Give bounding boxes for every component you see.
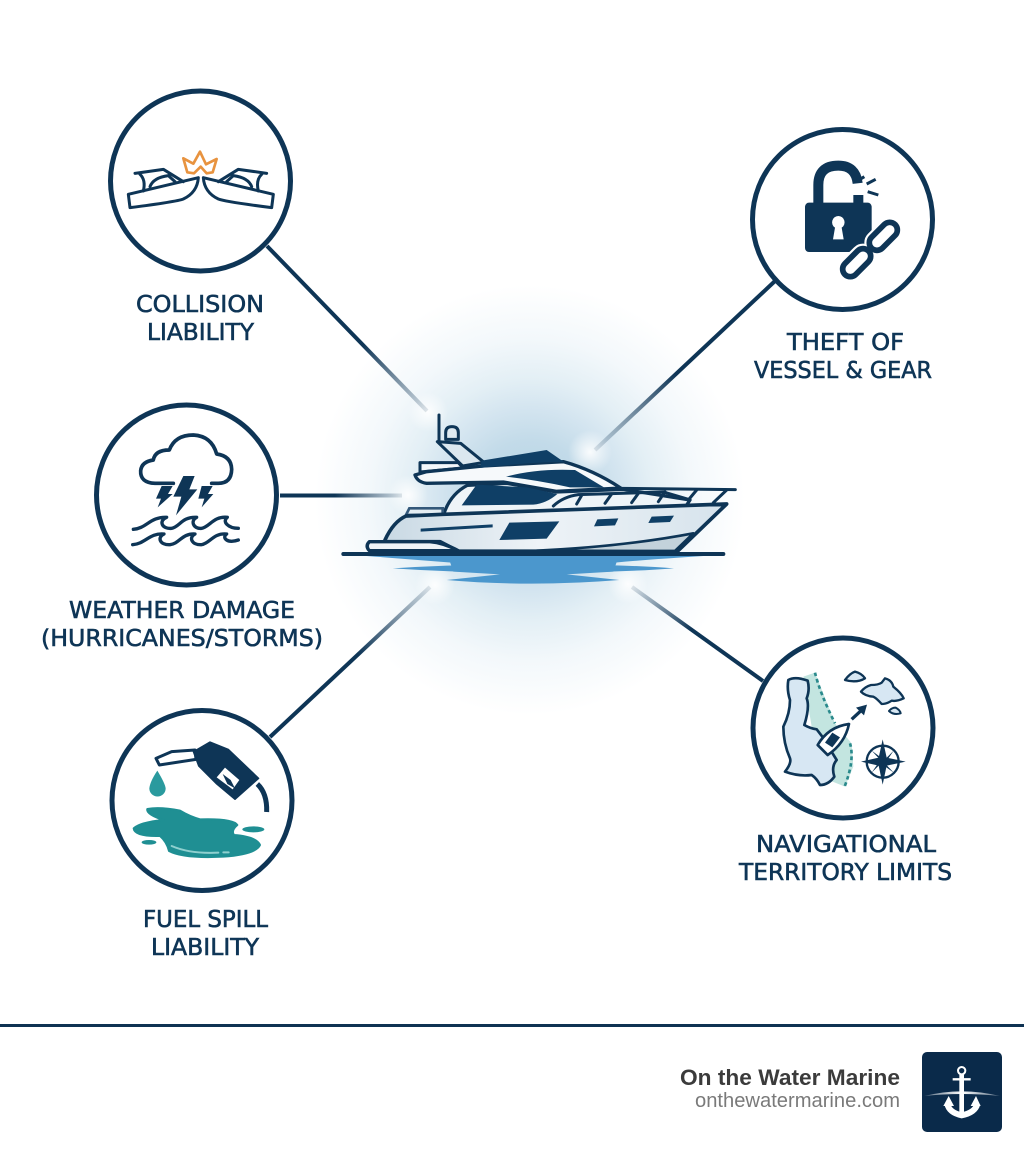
circle <box>752 130 932 310</box>
flybridge base <box>420 463 463 472</box>
panel: fuel spill liability <box>112 710 292 961</box>
icon: map, boat and compass <box>783 672 906 787</box>
label: COLLISION <box>136 292 264 318</box>
panel: navigational territory limits <box>738 638 952 886</box>
connector: navigation <box>632 587 763 681</box>
swim platform <box>367 542 458 551</box>
connector: fuel spill <box>270 587 430 737</box>
connector: weather <box>280 494 402 498</box>
label: NAVIGATIONAL <box>756 832 936 858</box>
label: VESSEL & GEAR <box>754 358 932 384</box>
label: LIABILITY <box>151 935 260 961</box>
connector end glows <box>388 392 648 605</box>
icon: storm cloud and waves <box>133 435 238 545</box>
bow rails <box>553 488 735 506</box>
main cabin <box>443 483 690 515</box>
label: WEATHER DAMAGE <box>69 598 295 624</box>
label: LIABILITY <box>147 320 255 346</box>
label: THEFT OF <box>786 330 904 356</box>
circle <box>110 91 290 271</box>
circle <box>96 405 276 585</box>
connector: theft <box>595 281 775 450</box>
icon: colliding boats <box>128 152 273 208</box>
circle <box>753 638 933 818</box>
aft cockpit <box>406 508 443 515</box>
panel: collision liability <box>110 91 290 346</box>
illustration: yacht <box>343 415 735 584</box>
footer brand name: On the Water Marine <box>680 1065 900 1090</box>
panel: weather damage <box>41 405 323 652</box>
connector: collision <box>267 246 427 411</box>
hull windows <box>421 516 674 540</box>
main window <box>462 485 557 505</box>
footer divider <box>0 1024 1024 1027</box>
label: (HURRICANES/STORMS) <box>41 626 323 652</box>
hull <box>385 504 727 552</box>
lower hull band <box>537 533 693 551</box>
icon: fuel nozzle and puddle <box>134 742 267 857</box>
upper window <box>506 470 604 487</box>
central blue glow <box>315 285 745 715</box>
label: FUEL SPILL <box>143 907 268 933</box>
water reflection <box>367 556 703 584</box>
flybridge roof <box>480 450 564 468</box>
icon: broken lock and chain <box>805 166 901 280</box>
label: TERRITORY LIMITS <box>738 860 952 886</box>
panel: theft of vessel and gear <box>752 130 932 384</box>
hull bottom and waterline <box>343 551 723 554</box>
upper white sweep <box>415 462 621 491</box>
circle <box>112 710 292 890</box>
radar mast <box>437 415 484 466</box>
footer url: onthewatermarine.com <box>695 1090 900 1112</box>
logo: anchor <box>922 1052 1002 1132</box>
